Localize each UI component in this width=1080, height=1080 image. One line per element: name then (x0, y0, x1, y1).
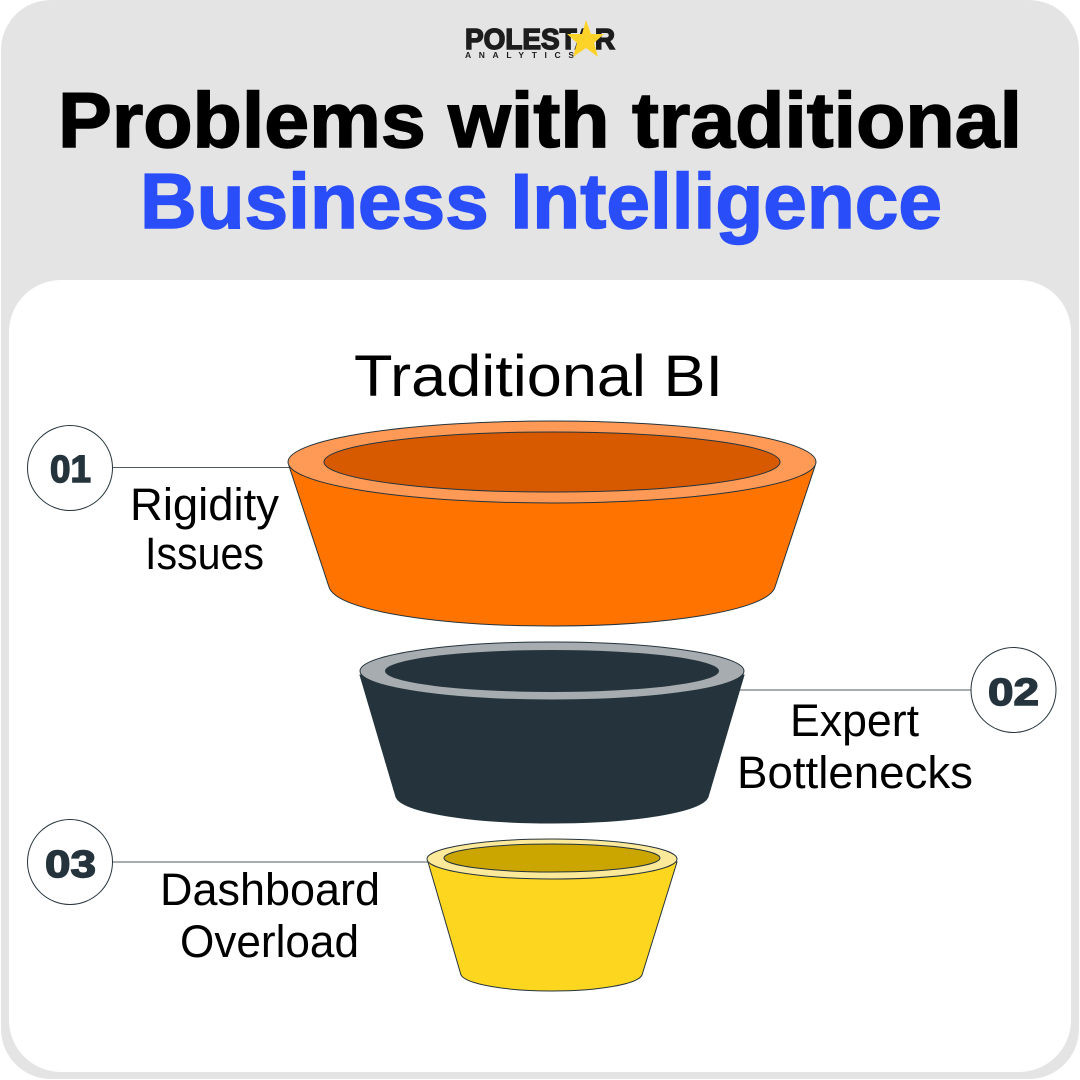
funnel tier 3: yellow (427, 839, 677, 991)
panel: main white panel (9, 280, 1071, 1072)
title: Business Intelligence (140, 157, 942, 245)
callout 02: Expert Bottlenecks: Bottlenecks (737, 747, 973, 798)
callout 01: Rigidity Issues: Issues (145, 528, 264, 579)
title: Problems with traditional (58, 76, 1022, 164)
logo: Polestar Analytics: ANALYTICS (465, 50, 574, 60)
callout 02: Expert Bottlenecks: 02 (988, 672, 1039, 714)
callout 01: Rigidity Issues: Rigidity (130, 479, 280, 530)
callout 03: Dashboard Overload: Dashboard (160, 864, 380, 915)
callout 03: Dashboard Overload (28, 820, 428, 967)
funnel tier 1: orange (288, 421, 816, 626)
callout 03: Dashboard Overload: Overload (180, 916, 359, 967)
callout 01: Rigidity Issues (28, 426, 289, 579)
funnel tier 2: dark slate (360, 642, 744, 823)
callout 02: Expert Bottlenecks: Expert (790, 695, 919, 746)
callout 03: Dashboard Overload: 03 (45, 844, 96, 886)
logo: Polestar Analytics: POLESTAR (465, 24, 615, 56)
heading: Traditional BI: Traditional BI (354, 344, 723, 409)
title (58, 76, 1022, 245)
callout 01: Rigidity Issues: 01 (50, 449, 91, 491)
callout 02: Expert Bottlenecks (737, 648, 1056, 798)
